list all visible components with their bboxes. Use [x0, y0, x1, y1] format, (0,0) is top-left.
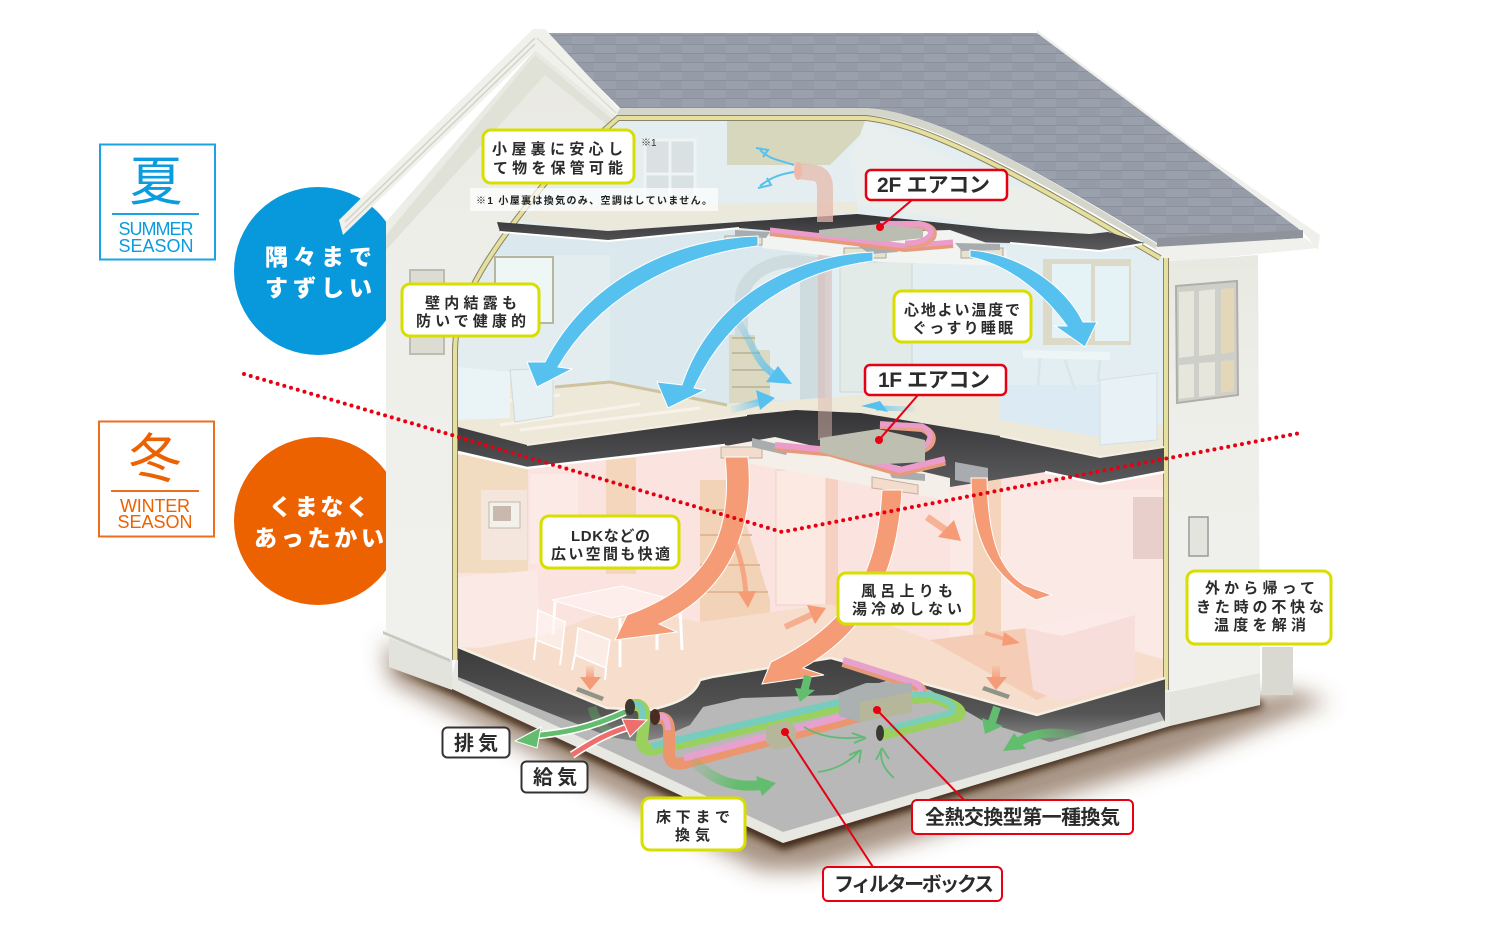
label: exhaust: 排気 [454, 732, 498, 755]
arrow: 1F warm air centre [762, 490, 902, 684]
arrow: stairs cool air [735, 317, 792, 384]
roof [545, 30, 1320, 263]
arrow: floor cool air [731, 390, 775, 410]
label: 2F air conditioner [866, 170, 1007, 200]
callout circle: summer: 隅々まで [265, 244, 372, 270]
dark floor slabs [458, 214, 1165, 742]
leader: filter box [781, 728, 873, 867]
label: heat exchange ventilation [912, 800, 1133, 834]
callout: after bath: 風呂上りも [861, 583, 953, 600]
ground shadow [384, 640, 1330, 870]
footnote: attic note [470, 188, 718, 211]
callout: attic storage: 小屋裏に安心し [492, 140, 623, 158]
arrow: bedroom floor cool air [861, 401, 915, 412]
arrow: attic air outflow lower [758, 172, 794, 188]
arrow: small warm air stairs [735, 543, 756, 608]
callout circle: summer [234, 187, 402, 355]
arrow: 2F cool air left [527, 236, 758, 387]
leader: 1F air conditioner [875, 395, 918, 444]
arrow: attic air outflow upper [756, 148, 794, 165]
callout: wall condensation [402, 284, 539, 336]
panel: summer season badge [100, 144, 215, 260]
callout: coming home: 温度を解消 [1214, 616, 1306, 634]
label: supply [522, 762, 588, 792]
panel: summer season badge: SEASON [118, 236, 194, 256]
arrow: 1F warm air right [971, 478, 1052, 600]
label: supply: 給気 [533, 766, 577, 789]
callout: comfortable sleep: 心地よい温度で [904, 301, 1020, 319]
arrow: small warm air bath [985, 632, 1020, 646]
first floor soffit and air conditioner ducts [720, 424, 988, 518]
footnote mark: ※1 [641, 138, 657, 149]
leader: 2F air conditioner [876, 200, 912, 231]
panel: winter season badge: 冬 [128, 430, 182, 489]
callout circle: winter: あったかい [254, 525, 384, 551]
foundation slab [450, 650, 1170, 843]
label: exhaust [442, 728, 510, 758]
insulation outline [455, 118, 1166, 690]
arrow: 2F cool air centre [657, 252, 873, 408]
callout: comfortable sleep [894, 291, 1031, 342]
label: 1F air conditioner: 1F エアコン [878, 369, 990, 392]
arrow: green down centre [795, 676, 815, 702]
attic [513, 118, 1150, 258]
underfloor ventilation ducts [576, 660, 1010, 764]
panel: winter season badge: WINTER [120, 496, 190, 516]
vertical duct between floors [818, 250, 832, 440]
panel: summer season badge: SUMMER [118, 219, 194, 239]
callout circle: winter: くまなく [269, 494, 369, 520]
callout: LDK comfort: LDKなどの [571, 528, 650, 545]
dining table [534, 586, 682, 680]
arrow: exhaust air [515, 712, 625, 748]
left wall and gable [339, 29, 622, 690]
callout: underfloor ventilation: 床下まで [656, 809, 730, 826]
arrow: vent down left [580, 666, 601, 690]
callout: coming home: 外から帰って [1205, 579, 1315, 597]
right side wall [1164, 255, 1293, 726]
label: heat exchange ventilation: 全熱交換型第一種換気 [925, 806, 1120, 829]
label: filter box: フィルターボックス [834, 873, 994, 896]
callout: underfloor ventilation: 換気 [675, 826, 710, 844]
callout circle: summer: すずしい [265, 275, 372, 301]
callout: attic storage: て物を保管可能 [493, 159, 623, 177]
panel: winter season badge: SEASON [118, 512, 192, 532]
arrows: intake converging on unit [804, 727, 894, 778]
red dotted season divider [244, 374, 1300, 532]
arrow: air to underfloor [692, 760, 776, 796]
label: 1F air conditioner [865, 365, 1006, 395]
arrow: green down right [982, 707, 1003, 734]
arrow: 2F cool air right [970, 250, 1097, 347]
attic duct [794, 162, 825, 222]
panel: winter season badge [99, 422, 214, 536]
callout: attic storage [483, 130, 634, 183]
callout: underfloor ventilation [642, 798, 745, 850]
callout: coming home: きた時の不快な [1196, 598, 1324, 616]
callout: after bath [838, 573, 974, 624]
arrow: 1F warm air left [615, 457, 749, 640]
panel: summer season badge: 夏 [130, 153, 182, 212]
interior cross-section [458, 118, 1165, 715]
first floor room [458, 445, 1165, 715]
callout: LDK comfort [541, 516, 679, 568]
callout: wall condensation: 防いで健康的 [416, 312, 526, 330]
callout: after bath: 湯冷めしない [852, 601, 962, 618]
callout: comfortable sleep: ぐっすり睡眠 [912, 320, 1013, 337]
second floor soffit and air conditioner ducts [725, 224, 1007, 266]
arrow: small warm air washroom [927, 517, 961, 541]
arrow: supply air [572, 719, 647, 755]
house illustration [339, 29, 1320, 843]
callout circle: winter [234, 437, 402, 605]
callout: coming home [1187, 571, 1331, 644]
label: filter box [823, 867, 1002, 901]
label: 2F air conditioner: 2F エアコン [877, 174, 990, 197]
arrow: small warm air door [785, 605, 826, 627]
arrow: vent down right [986, 666, 1007, 690]
arrow: green floor return [1003, 733, 1086, 751]
leader: heat exchange unit [873, 706, 964, 800]
footnote: attic note: ※1 小屋裏は換気のみ、空調はしていません。 [476, 194, 712, 207]
callout: LDK comfort: 広い空間も快適 [551, 545, 670, 563]
callout: wall condensation: 壁内結露も [425, 294, 517, 312]
second floor room [458, 220, 1165, 457]
